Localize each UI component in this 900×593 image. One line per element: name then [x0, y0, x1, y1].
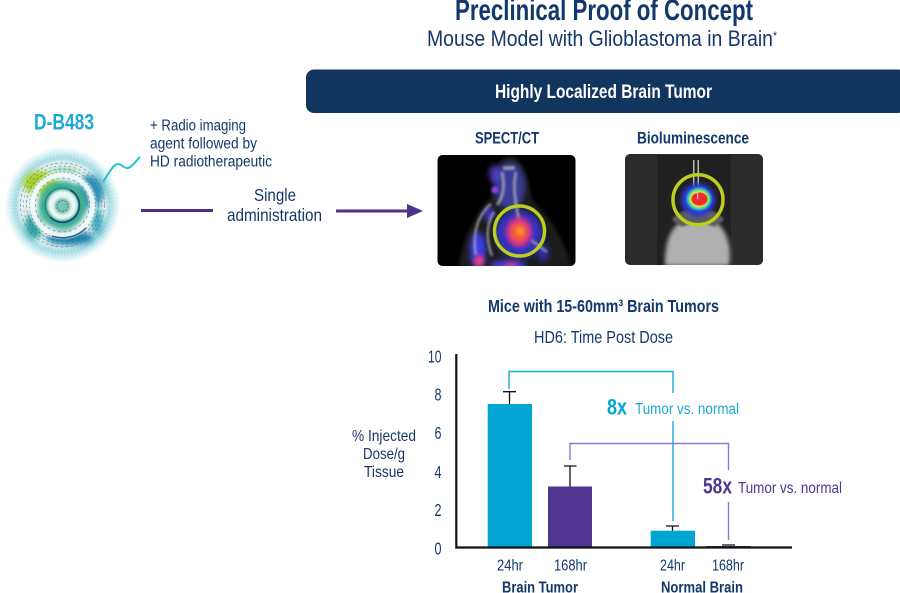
connector: 8x — [509, 372, 673, 521]
image: SPECT/CT scan — [438, 155, 576, 272]
y axis label: Dose/g — [363, 446, 405, 463]
callout: 8x: Tumor vs. normal — [635, 401, 739, 418]
connector: 58x — [570, 444, 728, 540]
subtitle: * — [773, 29, 777, 43]
banner: highly localized brain tumor: Highly Localized Brain Tumor — [495, 82, 712, 103]
y axis tick labels: 8 — [434, 384, 442, 404]
note: radio imaging agent: agent followed by — [150, 136, 257, 152]
chart subtitle: HD6: Time Post Dose — [534, 327, 673, 347]
x axis labels — [497, 558, 745, 593]
y axis tick labels: 6 — [434, 423, 442, 443]
y axis tick labels — [428, 346, 442, 558]
heading: bioluminescence: Bioluminescence — [637, 128, 749, 148]
heading: mice with brain tumors: Mice with 15-60mm³ Brain Tumors — [488, 296, 719, 316]
note: radio imaging agent: HD radiotherapeutic — [150, 154, 272, 170]
y axis tick labels: 0 — [434, 538, 442, 558]
callout: 58x — [703, 474, 842, 498]
bar: normal brain 168hr — [706, 546, 751, 548]
x axis labels: 24hr — [497, 558, 524, 574]
icon: D-B483 nanoparticle — [4, 147, 120, 263]
image: bioluminescence scan — [625, 154, 763, 266]
banner: highly localized brain tumor — [306, 70, 900, 113]
arrow: single administration — [141, 185, 423, 225]
arrow: single administration: administration — [227, 205, 322, 225]
bar: normal brain 24hr — [651, 531, 695, 548]
callout: 58x: 58x — [703, 474, 733, 498]
y axis label: % Injected — [352, 428, 416, 445]
error bars — [503, 392, 735, 545]
heading: SPECT/CT: SPECT/CT — [475, 128, 539, 148]
bar: brain tumor 24hr — [488, 404, 532, 547]
bar chart: tumor vs normal uptake — [428, 346, 842, 593]
x axis labels: 168hr — [712, 558, 745, 574]
callout: 58x: Tumor vs. normal — [738, 480, 842, 497]
x axis labels: 24hr — [660, 558, 686, 574]
subtitle: Mouse Model with Glioblastoma in Brain — [427, 26, 828, 51]
x axis labels: 168hr — [554, 558, 588, 574]
y axis label — [352, 428, 416, 481]
y axis tick labels: 2 — [434, 500, 442, 520]
squiggle connector — [103, 157, 140, 182]
arrow: single administration: Single — [254, 185, 296, 205]
y axis tick labels: 10 — [428, 346, 442, 366]
callout: 8x: 8x — [607, 394, 628, 420]
bar: brain tumor 168hr — [548, 486, 592, 548]
callout: 8x — [607, 394, 739, 420]
y axis label: Tissue — [364, 464, 404, 481]
y axis tick labels: 4 — [434, 462, 442, 482]
note: radio imaging agent: + Radio imaging — [150, 118, 246, 134]
axes — [456, 354, 792, 548]
drug name label: D-B483 — [34, 110, 94, 134]
note: radio imaging agent — [150, 118, 272, 170]
